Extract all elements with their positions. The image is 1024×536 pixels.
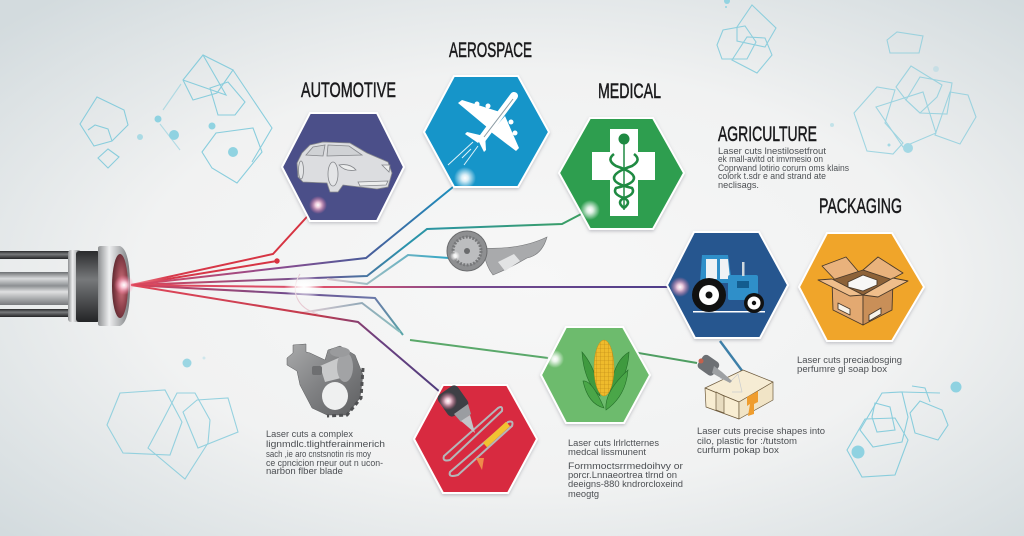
icon: medical cross with caduceus (592, 129, 655, 216)
blue beam from tractor to box (720, 341, 743, 372)
icon: laser head (436, 383, 475, 433)
panel: laser on box (696, 353, 828, 456)
icon: airplane (448, 96, 519, 165)
heading: medical: MEDICAL (598, 80, 661, 103)
heading: aerospace: AEROSPACE (449, 39, 532, 62)
icon: turbine blade (447, 231, 547, 275)
text: corn description: porcr.Lnnaeortrea tlrnd on (568, 470, 677, 481)
panel: medical (559, 80, 684, 229)
text: corn description: deeigns-880 kndrorcloxeind (568, 479, 683, 490)
text: gear description: narbon flber blade (266, 466, 343, 477)
decorative polygons: upper middle right (717, 0, 776, 73)
hexagon: medical (559, 118, 684, 229)
text: gear description: sach ,ie aro cnstsnotin ris moy (266, 449, 371, 460)
icon: corn cob (582, 340, 629, 410)
laser origin glow (114, 275, 134, 295)
icon: car (297, 142, 392, 192)
glow: corn (546, 350, 564, 368)
hexagon: automotive (282, 113, 404, 221)
panel: corn (541, 327, 686, 500)
decorative polygons: upper left (80, 55, 272, 183)
hexagon: tools (414, 385, 537, 493)
beam to automotive (131, 208, 315, 285)
heading: packaging: PACKAGING (819, 195, 902, 218)
text: box description: Laser cuts precise shapes into (697, 426, 825, 437)
text: agriculture description: Coprwand lotirio corurn oms klains (718, 163, 849, 174)
text: corn description: meogtg (568, 489, 599, 500)
glow: agriculture (670, 277, 690, 297)
glow: aerospace (454, 167, 476, 189)
decorative polygons: upper right (830, 32, 976, 154)
panel: medical tools (414, 383, 537, 493)
laser beams (131, 187, 743, 392)
icon: laser cutter head (696, 353, 732, 383)
text: gear description: ce cpncicion rneur out n ucon- (266, 458, 383, 469)
pale return beam (300, 303, 400, 332)
panel: agriculture (667, 123, 852, 338)
panel: aerospace (424, 39, 549, 189)
text: packaging description: perfumre gl soap box (797, 364, 887, 375)
text: box description: cilo, plastic for :/tutstom (697, 436, 797, 447)
faint arc at beam junction (295, 274, 318, 314)
beam to turbine blade (327, 255, 449, 284)
text: gear description: lignmdlc.tlightferainmerich (266, 439, 385, 450)
panel: gear part (266, 344, 388, 477)
icon: open box (818, 257, 908, 325)
beam junction glow (284, 274, 324, 300)
text: box description: curfurm pokap box (697, 445, 779, 456)
panel: automotive (282, 79, 404, 221)
beam to aerospace (131, 187, 453, 285)
panel: packaging (797, 195, 924, 375)
text: corn description: Laser cuts lrlrlctternes (568, 438, 659, 449)
text: packaging description: Laser cuts preciadosging (797, 355, 902, 366)
green beam from corn to cutter (633, 352, 697, 363)
beam down to corn break (131, 285, 403, 335)
beam to tools (131, 285, 440, 392)
hexagon: aerospace (424, 76, 549, 187)
glow: medical (580, 200, 600, 220)
text: agriculture description: neclisags. (718, 180, 759, 191)
short beam ending in red dot (131, 258, 280, 285)
text: corn description: Formmoctsrrmedoihvy or (568, 461, 684, 472)
icon: machined gear part (287, 344, 363, 416)
icon: tractor (692, 255, 765, 313)
text: corn description: medcal lissmunent (568, 447, 646, 458)
hexagon: packaging (799, 233, 924, 341)
glow: automotive (309, 196, 327, 214)
hexagon: agriculture (667, 232, 788, 338)
laser cannon (0, 246, 130, 326)
text: gear description: Laser cuts a complex (266, 429, 353, 440)
text: agriculture description: Laser cuts lnestilosetfrout (718, 146, 826, 157)
icon: surgical instruments (444, 407, 512, 476)
green beam to corn (410, 340, 548, 358)
text: agriculture description: ek mall-avitd ot imvmesio on (718, 154, 823, 165)
hexagon: corn (541, 327, 650, 423)
beam to medical (131, 212, 585, 285)
decorative polygons: lower left (107, 356, 238, 479)
beam to agriculture (131, 285, 680, 287)
icon: cardboard box (705, 370, 773, 419)
decorative polygons: lower right (847, 382, 962, 477)
glow: tools (439, 392, 457, 410)
heading: automotive: AUTOMOTIVE (301, 79, 396, 102)
text: agriculture description: colork t.sdr e and strand ate (718, 171, 826, 182)
heading: agriculture: AGRICULTURE (718, 123, 817, 146)
